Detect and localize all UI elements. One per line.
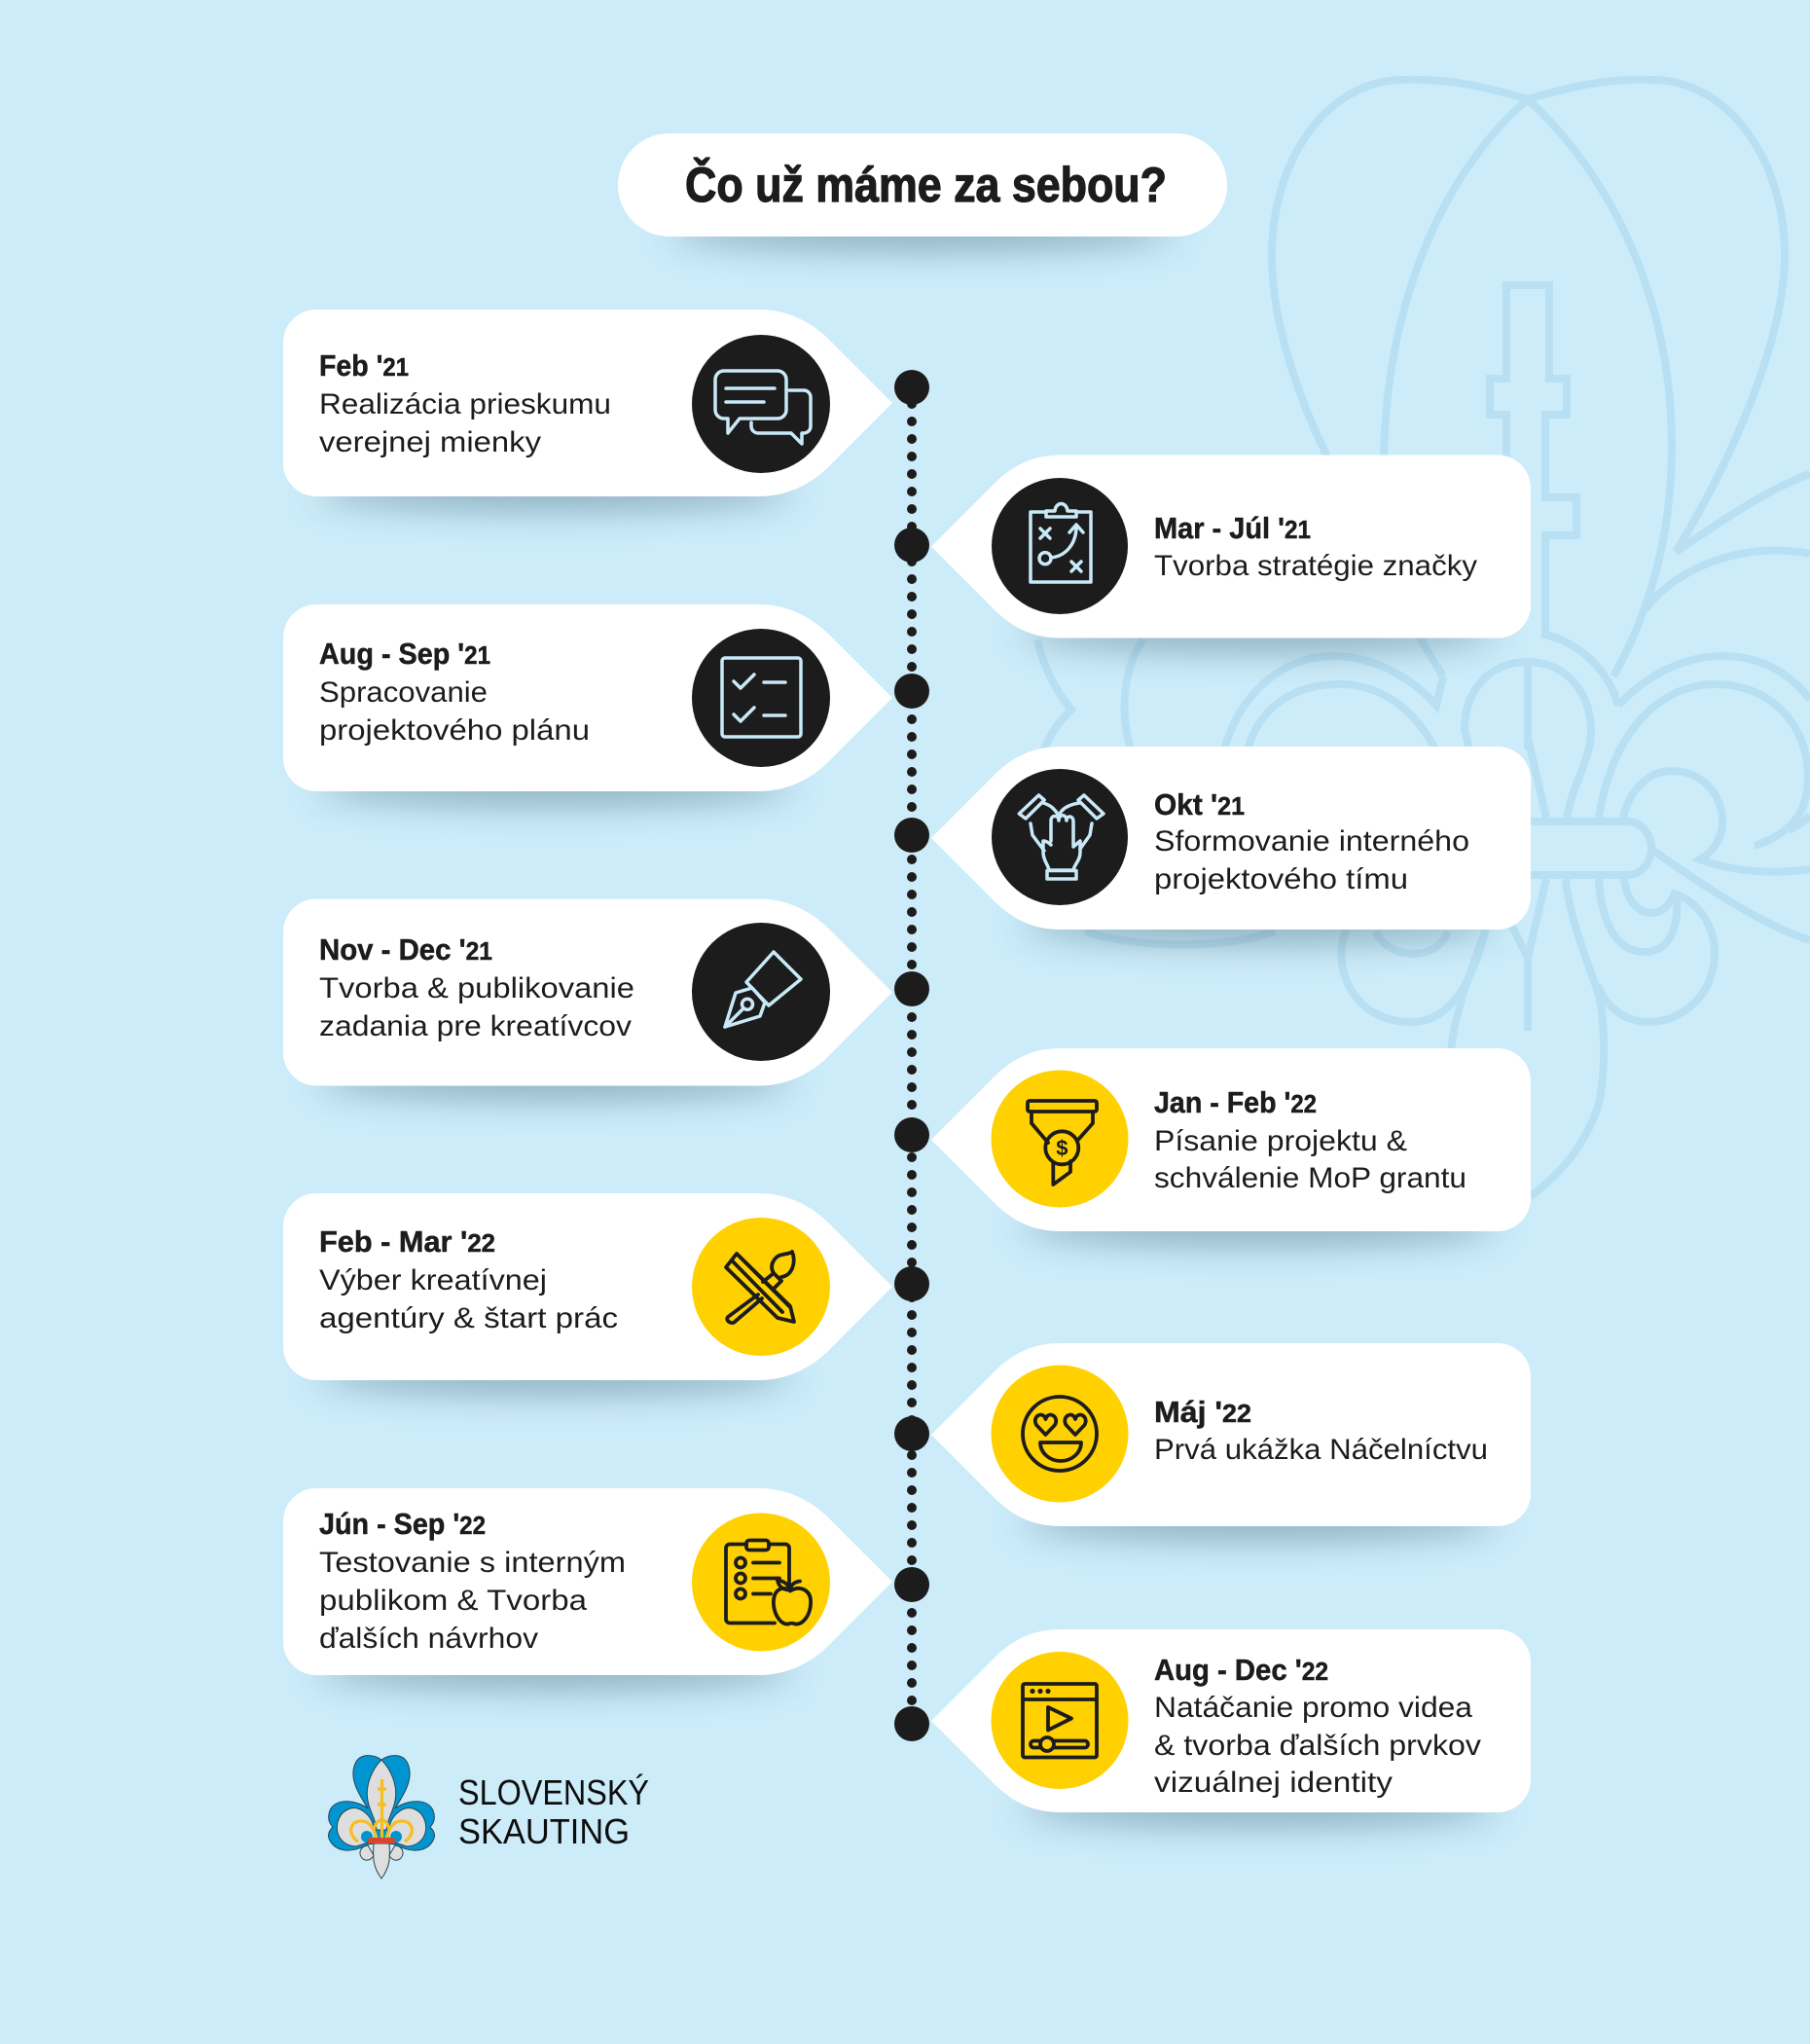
panel: Okt '21 [931, 747, 1531, 930]
panel: Aug - Sep '21 [283, 604, 892, 791]
panel: Mar - Júl '21 [931, 456, 1531, 639]
text: Aug - Dec '22: & tvorba ďalších prvkov [1154, 1730, 1481, 1762]
text: Máj '22: Prvá ukážka Náčelníctvu [1154, 1434, 1488, 1466]
text: Aug - Sep '21: Aug - Sep '21 [319, 637, 490, 671]
text: Aug - Sep '21: projektového plánu [319, 714, 590, 747]
text: Jan - Feb '22: schválenie MoP grantu [1154, 1162, 1466, 1194]
panel: Máj '22 [931, 1343, 1531, 1526]
text: Aug - Dec '22 [1154, 1653, 1481, 1799]
icon: pen nib [692, 923, 830, 1061]
icon: joined hands [992, 769, 1128, 905]
icon: chat bubbles [692, 335, 830, 473]
text: Feb - Mar '22 [319, 1224, 618, 1334]
text: Feb '21: Realizácia prieskumu [319, 388, 611, 420]
text: Feb '21: verejnej mienky [319, 426, 541, 458]
text: Okt '21: Sformovanie interného [1154, 825, 1469, 858]
text: Mar - Júl '21 [1154, 511, 1477, 582]
panel: Feb '21 [283, 310, 892, 496]
logo: Slovenský skauting [329, 1756, 649, 1879]
text: Máj '22 [1154, 1395, 1488, 1466]
timeline [894, 370, 929, 1741]
text: Jún - Sep '22: ďalších návrhov [319, 1623, 538, 1655]
text: Feb '21 [319, 348, 611, 458]
text: logo wordmark: SKAUTING [458, 1811, 630, 1851]
icon: clipboard with apple [692, 1513, 830, 1651]
text: Jan - Feb '22: Písanie projektu & [1154, 1125, 1407, 1157]
panel: Aug - Dec '22 [931, 1629, 1531, 1812]
text: Aug - Sep '21 [319, 637, 590, 747]
title: Čo už máme za sebou? [685, 157, 1167, 212]
watermark: fleur-de-lis [1037, 80, 1810, 1196]
text: Aug - Dec '22: Aug - Dec '22 [1154, 1653, 1328, 1687]
text: Nov - Dec '21: Nov - Dec '21 [319, 932, 492, 967]
icon: funnel with coin [991, 1071, 1129, 1207]
text: Jún - Sep '22: Jún - Sep '22 [319, 1507, 486, 1541]
text: Aug - Dec '22: vizuálnej identity [1154, 1767, 1393, 1799]
text: logo wordmark [458, 1772, 649, 1851]
panel: Nov - Dec '21 [283, 899, 892, 1086]
text: Feb - Mar '22: agentúry & štart prác [319, 1302, 618, 1334]
icon: fleur-de-lis emblem [329, 1756, 434, 1879]
text: Máj '22: Máj '22 [1154, 1395, 1251, 1429]
icon: video player [991, 1652, 1129, 1789]
text: Jan - Feb '22: Jan - Feb '22 [1154, 1085, 1317, 1119]
text: Nov - Dec '21 [319, 932, 634, 1042]
text: logo wordmark: SLOVENSKÝ [458, 1772, 649, 1812]
text: Nov - Dec '21: Tvorba & publikovanie [319, 972, 634, 1004]
text: Mar - Júl '21: Mar - Júl '21 [1154, 511, 1311, 545]
text: Okt '21: Okt '21 [1154, 787, 1245, 821]
text: Mar - Júl '21: Tvorba stratégie značky [1154, 550, 1477, 582]
icon: strategy clipboard [992, 478, 1128, 614]
text: Jún - Sep '22 [319, 1507, 626, 1655]
text: Aug - Sep '21: Spracovanie [319, 676, 488, 709]
panel: Jún - Sep '22 [283, 1488, 892, 1675]
icon: smiling face with heart eyes [991, 1365, 1129, 1503]
text: Jún - Sep '22: Testovanie s interným [319, 1547, 626, 1579]
panel: Feb - Mar '22 [283, 1193, 892, 1380]
icon: funnel with coin: $ [1056, 1136, 1068, 1160]
text: Okt '21 [1154, 787, 1469, 895]
text: Jún - Sep '22: publikom & Tvorba [319, 1585, 587, 1617]
icon: checklist [692, 629, 830, 767]
text: Feb '21: Feb '21 [319, 348, 409, 383]
title [618, 133, 1227, 237]
text: Nov - Dec '21: zadania pre kreatívcov [319, 1010, 632, 1042]
text: Okt '21: projektového tímu [1154, 863, 1408, 895]
text: Feb - Mar '22: Výber kreatívnej [319, 1264, 547, 1296]
icon: pencil and brush [692, 1218, 830, 1356]
panel: Jan - Feb '22 [931, 1048, 1531, 1231]
text: Aug - Dec '22: Natáčanie promo videa [1154, 1692, 1472, 1724]
text: Feb - Mar '22: Feb - Mar '22 [319, 1224, 495, 1259]
text: Jan - Feb '22 [1154, 1085, 1466, 1194]
